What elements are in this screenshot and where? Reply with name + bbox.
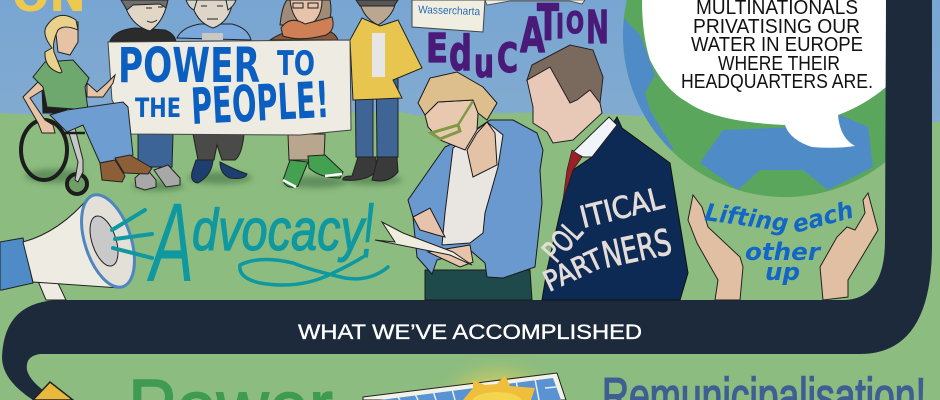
banner text: THE — [135, 93, 181, 124]
speech bubble text — [681, 0, 873, 93]
political partners label — [540, 188, 672, 292]
education word: C — [497, 36, 518, 82]
banner text: POWER — [118, 38, 260, 94]
education word: I — [556, 7, 564, 47]
banner text: TO — [277, 44, 315, 84]
lifting each other up: other — [745, 238, 822, 266]
education word: u — [474, 41, 494, 87]
background: sky — [0, 0, 940, 122]
lifting each other up: each — [789, 196, 856, 239]
person: woman with orange scarf — [270, 0, 343, 187]
education word: A — [520, 8, 545, 64]
political partners label: PART — [538, 242, 609, 298]
speech bubble — [642, 0, 886, 148]
advocacy word: dvocacy — [192, 198, 366, 263]
speech bubble text: HEADQUARTERS ARE. — [681, 71, 873, 93]
paper sign label: Wassercharta — [418, 4, 481, 18]
globe — [620, 0, 886, 200]
paper sign — [412, 0, 485, 32]
banner text: PEOPLE! — [190, 71, 330, 136]
advocacy word: ! — [362, 186, 374, 274]
education word: E — [426, 26, 448, 72]
advocacy word — [146, 202, 390, 287]
megaphone sound lines — [112, 210, 152, 258]
background: grass — [0, 112, 648, 122]
lifting each other up: up — [765, 258, 800, 286]
banner — [108, 38, 351, 136]
education word: d — [449, 26, 472, 82]
open book — [375, 222, 472, 265]
education word: N — [586, 1, 609, 54]
ground shadows — [25, 169, 402, 191]
hands — [688, 193, 878, 300]
lifting each other up — [704, 202, 852, 285]
speech bubble text: WHERE THEIR — [718, 53, 840, 75]
solar panel — [363, 372, 566, 400]
education word — [428, 2, 607, 78]
political partners label: NERS — [598, 222, 675, 277]
advocacy word: A — [146, 180, 194, 305]
political partners label: ITICAL — [576, 181, 668, 236]
person: man with grey hair — [110, 0, 180, 190]
education word: O — [566, 6, 584, 40]
speech bubble text: PRIVATISING OUR — [693, 16, 860, 38]
paper sign 2 — [485, 0, 585, 5]
speech bubble text: WATER IN EUROPE — [691, 34, 863, 56]
person: woman in wheelchair — [21, 15, 152, 194]
lifting each other up: Lifting — [703, 198, 790, 238]
megaphone — [0, 188, 145, 300]
person: man in suit — [527, 45, 688, 300]
warning sign icon — [33, 382, 73, 400]
person: man in yellow jacket — [343, 0, 422, 181]
person: woman reading — [408, 72, 543, 300]
political partners label: POL — [536, 215, 590, 269]
band heading: WHAT WE’VE ACCOMPLISHED — [298, 321, 642, 344]
person: older woman — [177, 0, 251, 183]
banner text — [121, 46, 326, 124]
sun icon — [463, 375, 535, 400]
